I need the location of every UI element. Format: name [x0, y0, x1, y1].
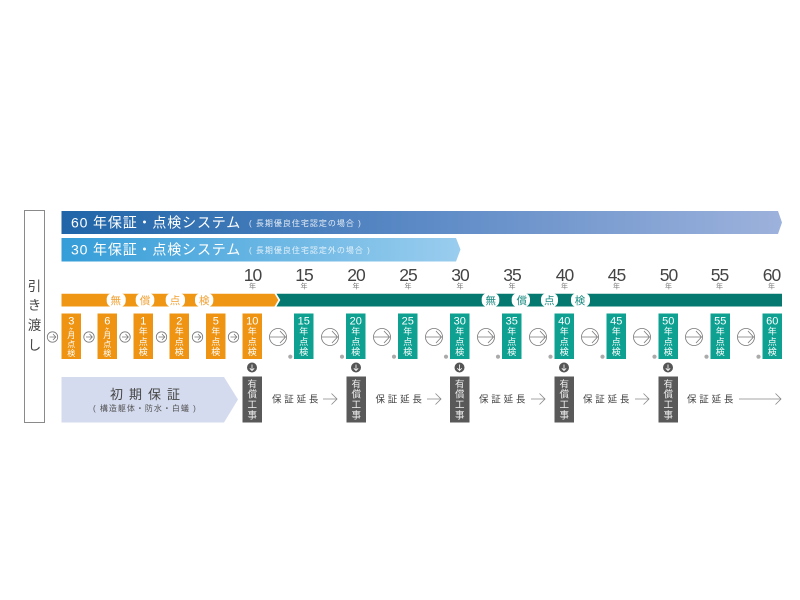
banner: 60 year system: [62, 211, 782, 234]
year scale: 年: [352, 282, 360, 290]
year scale: 年: [768, 282, 775, 290]
inspection boxes: orange: 点: [67, 340, 75, 349]
inspection boxes: teal: 年: [716, 326, 725, 336]
year scale: 35: [503, 265, 521, 285]
inspection boxes: teal: 検: [612, 346, 621, 357]
inspection boxes: orange: 年: [211, 326, 220, 336]
paid work boxes: 償: [247, 390, 257, 400]
panel: handover label: 引: [28, 279, 41, 294]
panel: handover label: 渡: [28, 318, 42, 333]
inspection boxes: orange: 点: [211, 337, 220, 347]
paid work boxes: 工: [351, 400, 361, 411]
inspection boxes: teal: 点: [507, 337, 516, 347]
inspection boxes: teal: 年: [507, 326, 516, 336]
inspection boxes: orange: 10: [246, 316, 258, 328]
inspection boxes: teal: 年: [403, 326, 412, 336]
inspection boxes: teal: 点: [768, 337, 777, 347]
inspection boxes: teal: [294, 314, 782, 359]
inspection boxes: teal: 検: [299, 346, 308, 357]
inspection boxes: orange: 5: [213, 316, 219, 328]
paid work boxes: 事: [455, 410, 465, 422]
inspection boxes: teal: 35: [506, 316, 518, 328]
year scale: 60: [763, 265, 781, 285]
year scale: 年: [665, 282, 672, 290]
paid work boxes: 有: [663, 378, 673, 390]
year scale: [244, 265, 781, 290]
inspection boxes: orange: 点: [139, 337, 148, 347]
inspection boxes: teal: 15: [298, 316, 310, 328]
panel: initial warranty: 初期保証: [110, 387, 186, 402]
band: free inspection teal: 無: [485, 294, 496, 307]
paid work boxes: 事: [663, 410, 673, 422]
warranty extension arrows: [323, 394, 781, 404]
icons: down arrows: [247, 362, 673, 372]
paid work boxes: 有: [351, 378, 361, 390]
paid work boxes: 有: [559, 378, 569, 390]
paid work boxes: 償: [351, 390, 361, 400]
inspection boxes: teal: 点: [664, 337, 673, 347]
year scale: 年: [613, 282, 620, 290]
inspection boxes: teal: 検: [716, 346, 725, 357]
year scale: 45: [608, 265, 625, 285]
band: free inspection teal: 点: [544, 295, 555, 307]
inspection boxes: teal: 検: [560, 346, 569, 357]
band: free inspection orange: 点: [170, 295, 180, 307]
inspection boxes: teal: 55: [714, 316, 726, 328]
icons: large circled arrows: [270, 328, 754, 346]
inspection boxes: orange: 1: [140, 316, 146, 328]
inspection boxes: teal: 50: [662, 316, 674, 328]
inspection boxes: teal: 年: [612, 326, 621, 336]
inspection boxes: orange: 検: [248, 346, 257, 357]
paid work boxes: 事: [351, 410, 361, 422]
inspection boxes: teal: 30: [454, 316, 466, 328]
paid work boxes: 工: [559, 400, 569, 411]
panel: handover label: き: [28, 298, 41, 313]
inspection boxes: teal: 検: [768, 346, 777, 357]
panel: initial warranty: [62, 377, 238, 422]
inspection boxes: orange: 検: [211, 346, 220, 357]
paid work boxes: 工: [663, 400, 673, 411]
inspection boxes: orange: 3: [68, 316, 74, 328]
banner: 30 year system: ( 長期優良住宅認定外の場合 ): [249, 245, 371, 255]
warranty extension labels: 保証延長: [376, 394, 425, 406]
paid work boxes: 償: [455, 390, 465, 400]
year scale: 10: [244, 265, 262, 285]
inspection boxes: orange: 検: [67, 348, 75, 358]
warranty extension labels: 保証延長: [479, 394, 528, 406]
inspection boxes: orange: 6: [104, 316, 110, 328]
inspection boxes: orange: 年: [139, 326, 148, 336]
inspection boxes: teal: 点: [612, 337, 621, 347]
inspection boxes: teal: 検: [507, 346, 516, 357]
inspection boxes: orange: 月: [67, 331, 75, 340]
banner: 60 year system: ( 長期優良住宅認定の場合 ): [249, 218, 362, 228]
inspection boxes: teal: 点: [716, 337, 725, 347]
paid work boxes: 有: [247, 378, 257, 390]
panel: handover label: [24, 210, 44, 422]
inspection boxes: orange: 検: [139, 346, 148, 357]
inspection boxes: teal: 検: [664, 346, 673, 357]
inspection boxes: teal: 年: [351, 326, 360, 336]
inspection boxes: orange: 年: [175, 326, 184, 336]
paid work boxes: 事: [559, 410, 569, 422]
banner: 30 year system: [62, 238, 460, 262]
inspection boxes: orange: 年: [248, 326, 257, 336]
banner: 30 year system: 30 年保証・点検システム: [71, 242, 241, 258]
year scale: 55: [711, 265, 728, 285]
inspection boxes: teal: 25: [402, 316, 414, 328]
inspection boxes: teal: 点: [560, 337, 569, 347]
paid work boxes: 償: [559, 390, 569, 400]
year scale: 25: [399, 265, 417, 285]
year scale: 年: [456, 282, 464, 290]
inspection boxes: teal: 40: [558, 316, 570, 328]
panel: handover label: し: [28, 338, 41, 353]
year scale: 30: [451, 265, 470, 285]
inspection boxes: teal: 点: [403, 337, 412, 347]
paid work boxes: 償: [663, 390, 673, 400]
inspection boxes: orange: ヶ: [69, 326, 74, 332]
paid work boxes: 工: [247, 400, 257, 411]
icons: small circled arrows: [47, 332, 239, 342]
year scale: 年: [561, 282, 568, 290]
year scale: 年: [404, 282, 412, 290]
inspection boxes: orange: 点: [248, 337, 257, 347]
inspection boxes: teal: 点: [455, 337, 464, 347]
year scale: 年: [508, 282, 516, 290]
note dots: [288, 355, 761, 359]
inspection boxes: teal: 検: [351, 346, 360, 357]
paid work boxes: 工: [455, 400, 465, 411]
inspection boxes: teal: 年: [455, 326, 464, 336]
band: free inspection orange: 無: [110, 294, 121, 307]
warranty extension labels: [272, 394, 736, 406]
panel: initial warranty: ( 構造躯体・防水・白蟻 ): [93, 403, 197, 413]
warranty extension labels: 保証延長: [583, 394, 632, 406]
inspection boxes: teal: 検: [455, 346, 464, 357]
inspection boxes: orange: 検: [103, 348, 111, 358]
band: free inspection teal: [276, 293, 782, 307]
inspection boxes: orange: ヶ: [105, 326, 110, 332]
year scale: 40: [556, 265, 574, 285]
inspection boxes: teal: 45: [610, 316, 622, 328]
year scale: 50: [660, 265, 678, 285]
year scale: 年: [300, 282, 308, 290]
warranty extension labels: 保証延長: [272, 394, 321, 406]
band: free inspection teal: 検: [575, 294, 586, 307]
inspection boxes: teal: 20: [350, 316, 362, 328]
band: free inspection orange: 償: [140, 294, 151, 307]
paid work boxes: 事: [247, 410, 257, 422]
inspection boxes: orange: [62, 314, 262, 359]
warranty extension labels: 保証延長: [687, 394, 736, 406]
band: free inspection orange: 検: [199, 294, 210, 307]
year scale: 20: [347, 265, 366, 285]
inspection boxes: orange: 月: [103, 331, 111, 340]
inspection boxes: teal: 年: [768, 326, 777, 336]
inspection boxes: teal: 60: [766, 316, 778, 328]
year scale: 15: [295, 265, 313, 285]
inspection boxes: teal: 点: [351, 337, 360, 347]
inspection boxes: teal: 年: [299, 326, 308, 336]
year scale: 年: [249, 282, 256, 290]
year scale: 年: [716, 282, 723, 290]
inspection boxes: teal: 検: [403, 346, 412, 357]
band: free inspection teal: 償: [516, 294, 527, 307]
inspection boxes: orange: 点: [175, 337, 184, 347]
inspection boxes: orange: 2: [176, 316, 182, 328]
banner: 60 year system: 60 年保証・点検システム: [71, 214, 241, 230]
paid work boxes: 有: [455, 378, 465, 390]
inspection boxes: orange: 検: [175, 346, 184, 357]
band: free inspection orange: [62, 293, 278, 307]
inspection boxes: teal: 点: [299, 337, 308, 347]
inspection boxes: teal: 年: [664, 326, 673, 336]
paid work boxes: [242, 376, 678, 422]
inspection boxes: orange: 点: [103, 340, 111, 349]
inspection boxes: teal: 年: [560, 326, 569, 336]
